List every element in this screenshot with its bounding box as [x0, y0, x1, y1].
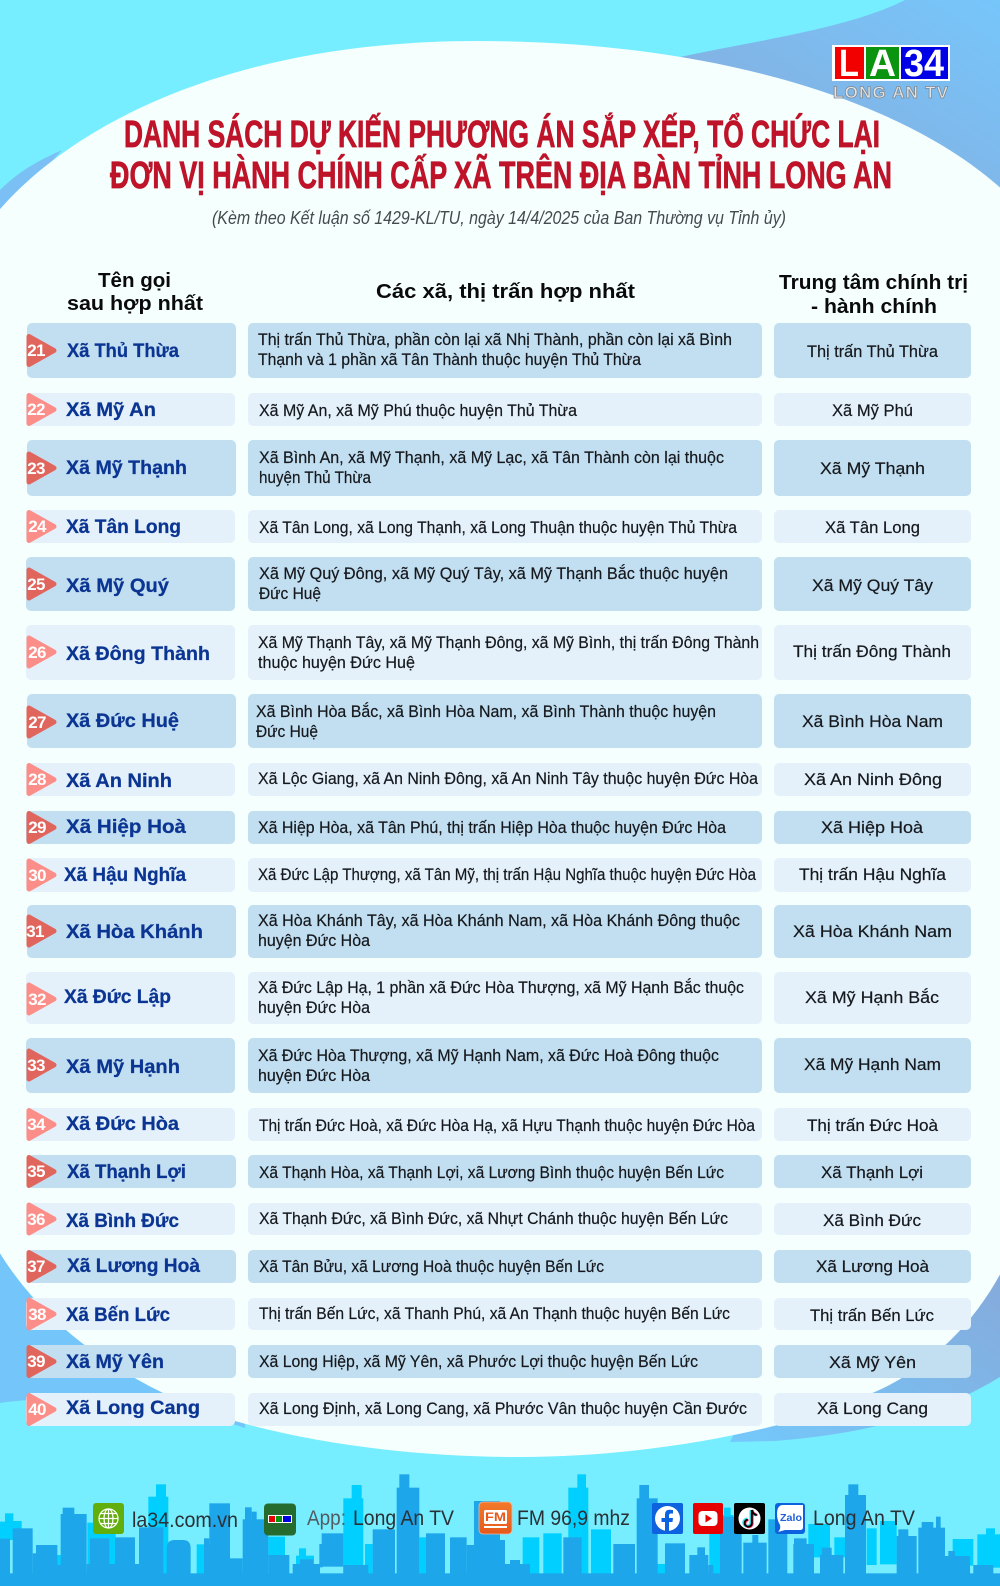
row 37: Xã Lương Hoà — [67, 1255, 200, 1277]
row 38: Xã Bến Lức — [66, 1304, 170, 1326]
footer: FM radio: FM — [485, 1510, 506, 1524]
column header: centre: - hành chính — [811, 296, 937, 318]
row 38: 38 — [28, 1305, 46, 1324]
row 24: 24 — [28, 517, 47, 536]
row 24: Xã Tân Long, xã Long Thạnh, xã Long Thuận thuộc huyện Thủ Thừa — [259, 519, 738, 537]
row 37 — [27, 1250, 971, 1283]
logo LA34 Long An TV: L — [839, 43, 859, 85]
column header: name: Tên gọi — [98, 270, 171, 292]
row 24 — [26, 510, 971, 543]
row 37: Xã Lương Hoà — [816, 1257, 930, 1276]
footer: app: Long An TV — [353, 1507, 454, 1530]
row 23: huyện Thủ Thừa — [259, 469, 372, 487]
row 25: 25 — [27, 575, 45, 594]
row 33: Xã Mỹ Hạnh Nam — [804, 1055, 941, 1074]
row 24: Xã Tân Long — [825, 518, 920, 537]
row 30: Thị trấn Hậu Nghĩa — [799, 865, 947, 884]
icon: facebook — [652, 1503, 683, 1534]
row 21: Thạnh và 1 phần xã Tân Thành thuộc huyện Thủ Thừa — [258, 351, 642, 369]
row 23: Xã Mỹ Thạnh — [66, 457, 187, 479]
row 22: Xã Mỹ An, xã Mỹ Phú thuộc huyện Thủ Thừa — [259, 402, 578, 420]
row 26 — [26, 625, 971, 680]
row 40: Xã Long Cang — [817, 1399, 928, 1418]
row 33 — [26, 1038, 971, 1093]
footer: FM radio: FM 96,9 mhz — [517, 1507, 630, 1530]
footer: app: App: — [307, 1507, 346, 1530]
row 21: Thị trấn Thủ Thừa — [807, 342, 939, 361]
row 22: Xã Mỹ An — [66, 399, 156, 421]
row 31: huyện Đức Hòa — [258, 932, 371, 950]
row 31: Xã Hòa Khánh Tây, xã Hòa Khánh Nam, xã Hòa Khánh Đông thuộc — [258, 912, 740, 930]
footer: social name: Long An TV — [813, 1507, 915, 1530]
background: blue swoosh bottom right — [730, 1260, 1000, 1442]
row 31 — [26, 905, 971, 958]
footer: website: la34.com.vn — [132, 1509, 238, 1532]
footer: website — [93, 1503, 238, 1534]
row 26: thuộc huyện Đức Huệ — [258, 654, 415, 672]
row 26: 26 — [28, 643, 46, 662]
column header: merged communes: Các xã, thị trấn hợp nhất — [376, 281, 635, 303]
icon: youtube — [693, 1503, 723, 1534]
row 23: Xã Bình An, xã Mỹ Thạnh, xã Mỹ Lạc, xã Tân Thành còn lại thuộc — [259, 449, 724, 467]
row 29: Xã Hiệp Hoà — [66, 816, 186, 838]
icon: zalo — [775, 1503, 805, 1534]
row 23 — [27, 440, 971, 496]
row 25: Xã Mỹ Quý Tây — [812, 576, 934, 595]
row 21: Thị trấn Thủ Thừa, phần còn lại xã Nhị Thành, phần còn lại xã Bình — [258, 331, 732, 349]
row 34: Thị trấn Đức Hoà, xã Đức Hòa Hạ, xã Hựu Thạnh thuộc huyện Đức Hòa — [259, 1117, 756, 1135]
row 27: Xã Đức Huệ — [66, 710, 179, 732]
row 29: 29 — [28, 818, 46, 837]
row 32: Xã Đức Lập Hạ, 1 phần xã Đức Hòa Thượng, xã Mỹ Hạnh Bắc thuộc — [258, 978, 744, 997]
background: blue sliver top left — [0, 150, 62, 220]
row 27: 27 — [28, 713, 46, 732]
row 21: Xã Thủ Thừa — [67, 340, 179, 362]
row 33: 33 — [27, 1056, 45, 1075]
row 28: Xã An Ninh Đông — [804, 770, 942, 789]
column header: centre — [779, 272, 968, 318]
row 36: Xã Thạnh Đức, xã Bình Đức, xã Nhựt Chánh thuộc huyện Bến Lức — [259, 1210, 728, 1228]
row 21: 21 — [27, 341, 45, 360]
row 23: Xã Mỹ Thạnh — [820, 459, 925, 478]
row 30: Xã Đức Lập Thượng, xã Tân Mỹ, thị trấn Hậu Nghĩa thuộc huyện Đức Hòa — [258, 866, 757, 884]
skyline — [0, 1474, 1000, 1586]
row 38: Thị trấn Bến Lức — [810, 1306, 934, 1325]
row 24: Xã Tân Long — [66, 516, 181, 538]
icon: zalo: Zalo — [780, 1512, 802, 1524]
row 32: huyện Đức Hòa — [258, 999, 371, 1017]
row 28 — [26, 763, 971, 796]
row 33: huyện Đức Hòa — [258, 1067, 371, 1085]
row 31: Xã Hòa Khánh Nam — [793, 922, 952, 941]
row 25 — [26, 557, 971, 611]
row 29: Xã Hiệp Hòa, xã Tân Phú, thị trấn Hiệp Hòa thuộc huyện Đức Hòa — [258, 819, 727, 837]
row 22: Xã Mỹ Phú — [832, 401, 913, 420]
row 27 — [27, 694, 971, 748]
row 37: 37 — [27, 1257, 45, 1276]
row 25: Đức Huệ — [259, 585, 321, 603]
row 37: Xã Tân Bửu, xã Lương Hoà thuộc huyện Bến Lức — [259, 1258, 604, 1276]
row 26: Xã Mỹ Thạnh Tây, xã Mỹ Thạnh Đông, xã Mỹ Bình, thị trấn Đông Thành — [258, 634, 759, 652]
row 34 — [26, 1108, 971, 1141]
row 30: 30 — [28, 866, 46, 885]
row 23: 23 — [27, 459, 45, 478]
row 39: 39 — [27, 1352, 45, 1371]
logo LA34 Long An TV: LONG AN TV — [833, 83, 949, 102]
row 29: Xã Hiệp Hoà — [821, 818, 924, 837]
row 33: Xã Mỹ Hạnh — [66, 1056, 180, 1078]
row 25: Xã Mỹ Quý Đông, xã Mỹ Quý Tây, xã Mỹ Thạnh Bắc thuộc huyện — [259, 564, 728, 583]
logo LA34 Long An TV: A — [869, 43, 896, 85]
row 32: 32 — [28, 990, 46, 1009]
row 26: Thị trấn Đông Thành — [793, 642, 951, 661]
row 35: Xã Thạnh Lợi — [821, 1163, 923, 1182]
footer: FM radio — [479, 1502, 630, 1534]
row 39: Xã Mỹ Yên — [829, 1353, 916, 1372]
column header: centre: Trung tâm chính trị — [779, 272, 968, 294]
row 25: Xã Mỹ Quý — [66, 575, 169, 597]
row 32: Xã Mỹ Hạnh Bắc — [805, 988, 940, 1007]
column header: name: sau hợp nhất — [67, 293, 203, 315]
row 31: 31 — [26, 922, 44, 941]
row 21 — [27, 323, 971, 378]
row 35 — [27, 1155, 971, 1188]
row 40: Xã Long Cang — [66, 1397, 200, 1419]
footer: app — [264, 1504, 454, 1536]
row 35: Xã Thạnh Hòa, xã Thạnh Lợi, xã Lương Bình thuộc huyện Bến Lức — [259, 1164, 724, 1182]
row 30: Xã Hậu Nghĩa — [64, 864, 186, 886]
row 34: 34 — [27, 1115, 46, 1134]
column header: name — [67, 270, 203, 315]
row 32 — [26, 972, 971, 1024]
row 27: Xã Bình Hòa Bắc, xã Bình Hòa Nam, xã Bình Thành thuộc huyện — [256, 702, 716, 721]
row 40: Xã Long Định, xã Long Cang, xã Phước Vân thuộc huyện Cần Đước — [259, 1400, 747, 1418]
row 27: Đức Huệ — [256, 723, 318, 741]
row 36: Xã Bình Đức — [823, 1211, 921, 1230]
row 34: Thị trấn Đức Hoà — [807, 1116, 939, 1135]
logo LA34 Long An TV: 34 — [904, 43, 944, 85]
row 28: Xã Lộc Giang, xã An Ninh Đông, xã An Ninh Tây thuộc huyện Đức Hòa — [258, 770, 759, 788]
row 36: 36 — [27, 1210, 45, 1229]
row 31: Xã Hòa Khánh — [66, 921, 203, 943]
row 35: 35 — [27, 1162, 45, 1181]
row 40 — [26, 1393, 971, 1426]
row 33: Xã Đức Hòa Thượng, xã Mỹ Hạnh Nam, xã Đức Hoà Đông thuộc — [258, 1047, 719, 1065]
row 28: 28 — [28, 770, 46, 789]
title — [110, 111, 892, 197]
row 39 — [27, 1345, 971, 1378]
row 38 — [26, 1298, 971, 1330]
subtitle: (Kèm theo Kết luận số 1429-KL/TU, ngày 14/4/2025 của Ban Thường vụ Tỉnh ủy) — [212, 207, 786, 228]
background: blue swoosh top right — [680, 0, 1000, 200]
background: blue swoosh bottom left — [0, 1240, 250, 1428]
row 39: Xã Long Hiệp, xã Mỹ Yên, xã Phước Lợi thuộc huyện Bến Lức — [259, 1353, 698, 1371]
row 36 — [26, 1203, 971, 1235]
row 38: Thị trấn Bến Lức, xã Thanh Phú, xã An Thạnh thuộc huyện Bến Lức — [259, 1305, 730, 1323]
row 22 — [26, 393, 971, 426]
row 26: Xã Đông Thành — [66, 643, 210, 665]
row 27: Xã Bình Hòa Nam — [802, 712, 943, 731]
row 39: Xã Mỹ Yên — [66, 1351, 164, 1373]
logo LA34 Long An TV — [832, 43, 950, 102]
row 40: 40 — [28, 1400, 46, 1419]
icon: tiktok — [734, 1503, 765, 1534]
row 35: Xã Thạnh Lợi — [67, 1161, 186, 1183]
row 36: Xã Bình Đức — [66, 1210, 179, 1232]
row 22: 22 — [27, 400, 45, 419]
row 28: Xã An Ninh — [66, 770, 172, 792]
row 30 — [26, 858, 971, 892]
row 32: Xã Đức Lập — [64, 986, 171, 1008]
row 34: Xã Đức Hòa — [66, 1113, 179, 1135]
row 29 — [26, 811, 971, 844]
